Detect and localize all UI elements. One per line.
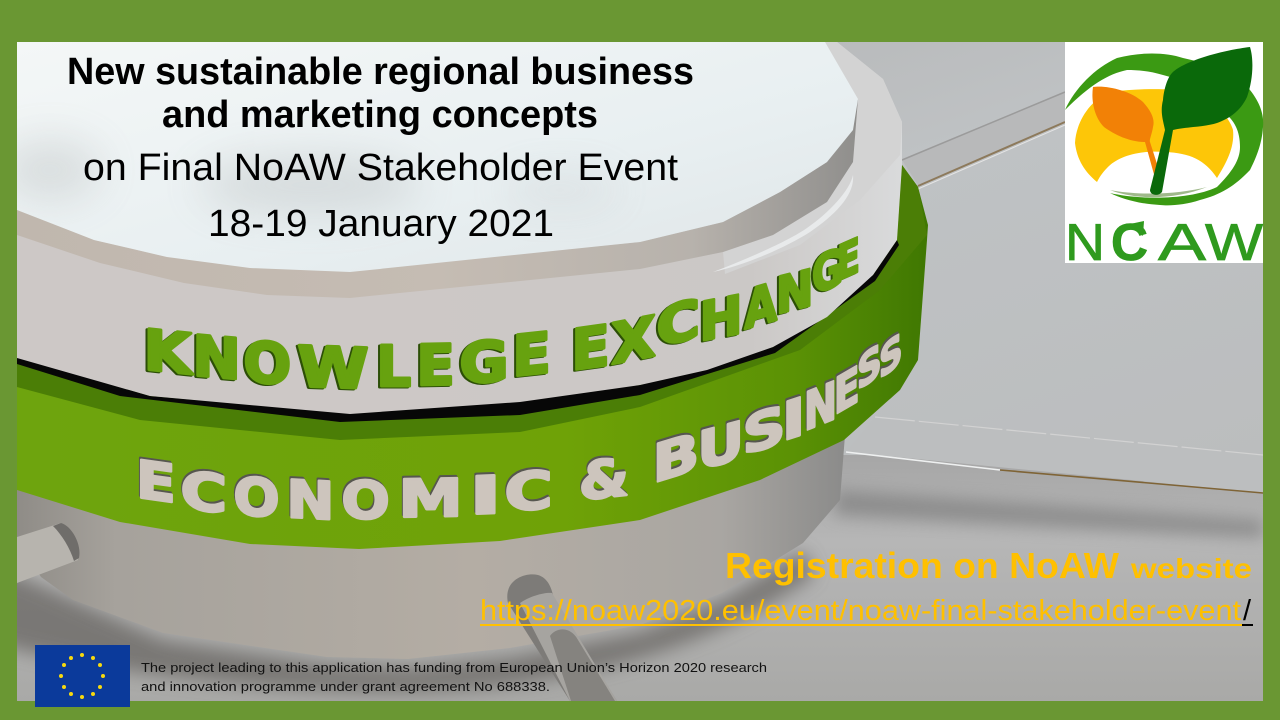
floor [17,455,1263,701]
title: New sustainable regional business [67,51,694,93]
lettering: KNOWLEGE EXCHANGE: O [244,330,291,398]
title: 18-19 January 2021 [208,203,554,245]
NoAW logo [1065,42,1263,272]
ring top surface [723,229,784,274]
funding acknowledgement [141,660,767,694]
EU flag [35,645,130,707]
wall groove [846,92,1263,493]
logo letters: C [1111,214,1148,272]
lettering: KNOWLEGE EXCHANGE: X [612,304,656,378]
lettering: ECONOMIC & BUSINESS: S [879,322,903,390]
lettering: KNOWLEGE EXCHANGE: E [837,228,860,293]
lettering: KNOWLEGE EXCHANGE: W [298,335,369,402]
orange leaf [1092,87,1158,178]
registration callout: website [1130,553,1252,584]
green band [17,165,928,549]
lettering: KNOWLEGE EXCHANGE: C [656,287,700,360]
lettering: KNOWLEGE EXCHANGE: E [512,321,551,390]
lettering: ECONOMIC & BUSINESS: U [698,410,744,483]
top disc surface [17,42,858,272]
lettering: KNOWLEGE EXCHANGE: L [376,335,411,400]
lettering: ECONOMIC & BUSINESS: S [742,394,786,468]
black seam [17,240,899,422]
lettering: ECONOMIC & BUSINESS [138,331,901,520]
registration callout: Registration on NoAW [725,545,1119,586]
thin swoosh [1110,187,1207,197]
lettering: KNOWLEGE EXCHANGE: K [144,317,194,388]
lettering: ECONOMIC & BUSINESS: & [579,446,629,512]
funding acknowledgement: The project leading to this application has funding from European Union’s Horizon 2020 research [141,660,767,675]
logo letters: N [1065,214,1105,272]
dark green shadow band [17,165,927,440]
lettering: KNOWLEGE EXCHANGE: E [572,314,610,384]
lettering: KNOWLEGE EXCHANGE: H [700,284,743,354]
grey bevel [17,99,858,298]
lettering: KNOWLEGE EXCHANGE: G [812,237,843,306]
title: and marketing concepts [162,94,598,136]
green swoosh [1065,54,1263,205]
logo letters: W [1205,214,1263,272]
registration link: https://noaw2020.eu/event/noaw-final-stakeholder-event [480,595,1241,627]
title [67,51,694,245]
lettering: ECONOMIC & BUSINESS: I [470,465,501,526]
lettering: ECONOMIC & BUSINESS: E [834,354,860,427]
logo letters [1065,214,1263,272]
right tube [507,574,617,701]
floor strip [880,455,1263,492]
lettering: KNOWLEGE EXCHANGE [146,236,858,390]
left tube [17,523,80,583]
yellow crescent [1075,89,1233,182]
back wall [837,42,1263,455]
lettering: ECONOMIC & BUSINESS: N [286,469,334,532]
grey base [17,435,845,659]
lettering: ECONOMIC & BUSINESS: E [136,449,176,516]
lettering: KNOWLEGE EXCHANGE: A [744,272,777,342]
lettering: ECONOMIC & BUSINESS: M [398,468,463,529]
lettering: ECONOMIC & BUSINESS: B [652,421,699,495]
registration link: / [1243,595,1252,627]
floor shadow [835,490,1263,538]
lettering: ECONOMIC & BUSINESS: C [504,459,553,523]
disc shading [17,134,410,220]
logo letters: A [1158,214,1206,272]
base shadow [0,550,815,692]
lettering: KNOWLEGE EXCHANGE: G [460,328,509,397]
lettering: ECONOMIC & BUSINESS: C [180,460,227,525]
lettering: ECONOMIC & BUSINESS: N [804,371,837,444]
lettering: KNOWLEGE EXCHANGE: E [416,333,455,399]
title: on Final NoAW Stakeholder Event [83,147,678,189]
lettering: ECONOMIC & BUSINESS: S [857,334,882,402]
lettering: ECONOMIC & BUSINESS: O [234,466,279,530]
dark green leaf [1150,47,1252,195]
lettering: ECONOMIC & BUSINESS: O [342,470,390,531]
white ring [17,104,902,414]
lettering: ECONOMIC & BUSINESS: I [782,385,805,453]
recycle arrow on logo [1130,221,1144,236]
lettering: KNOWLEGE EXCHANGE: N [776,259,813,327]
logo background [1065,42,1263,263]
funding acknowledgement: and innovation programme under grant agreement No 688338. [141,679,550,694]
lettering: KNOWLEGE EXCHANGE: N [192,324,241,393]
ring highlight [713,175,853,272]
